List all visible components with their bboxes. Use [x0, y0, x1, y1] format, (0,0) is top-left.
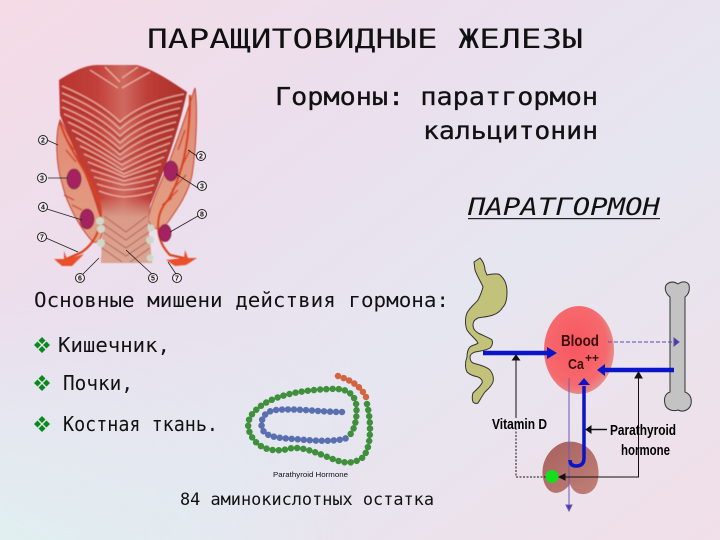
dashed arrow: blood to bone — [608, 338, 679, 346]
list: targets: Почки, — [63, 371, 133, 395]
icon: bone — [665, 282, 691, 411]
number labels: 4 — [41, 204, 45, 212]
bullet icon — [34, 337, 50, 353]
label: blood Ca: ++ — [585, 351, 599, 365]
number labels — [38, 136, 206, 282]
parathyroid glands — [67, 161, 178, 242]
number labels: 7 — [40, 234, 44, 242]
arrow: parathyroid hormone to bone and kidney — [559, 372, 642, 480]
green beads — [248, 389, 370, 462]
leader lines — [46, 140, 198, 275]
number labels: 6 — [78, 276, 82, 282]
left thyroid lobe — [57, 120, 102, 242]
list: targets: Кишечник, — [58, 333, 170, 357]
label: parathyroid hormone: hormone — [621, 442, 670, 459]
caption: Parathyroid Hormone — [273, 470, 348, 479]
blue beads — [262, 409, 347, 441]
label: vitamin D: Vitamin D — [492, 416, 547, 433]
bullet icon — [34, 375, 50, 391]
text block: hormones: Гормоны: паратгормон — [275, 82, 598, 111]
larynx muscle — [59, 65, 187, 263]
blue arrow: kidney to blood — [570, 378, 590, 466]
muscle fibres — [62, 67, 184, 197]
muscle shadows — [62, 89, 184, 179]
number labels: 5 — [151, 276, 155, 282]
list: targets: Костная ткань. — [63, 412, 218, 436]
label: parathyroid hormone: Parathyroid — [610, 422, 676, 439]
diagram: calcium regulation — [466, 258, 691, 511]
icon: green dot — [546, 470, 558, 483]
label: blood Ca: Blood — [561, 333, 599, 350]
text: main targets: Основные мишени действия гормона: — [34, 288, 449, 312]
icon: intestine — [466, 258, 507, 403]
icon: kidney — [542, 442, 598, 494]
number labels: 2 — [41, 138, 45, 144]
number labels: 3 — [40, 176, 44, 182]
number labels: 7 — [175, 276, 179, 282]
number labels: 3 — [200, 184, 204, 190]
caption: amino acid residues: 84 аминокислотных остатка — [180, 490, 434, 510]
label: blood Ca — [561, 333, 599, 373]
number labels: 8 — [200, 212, 204, 218]
icon: blood — [544, 306, 614, 394]
illustration: peptide chain — [248, 376, 370, 479]
lobe mottling — [64, 130, 190, 210]
text block: hormones — [275, 82, 598, 145]
thin arrow: calcium excretion — [566, 378, 572, 511]
orange beads — [338, 376, 366, 397]
heading: parathormone: ПАРАТГОРМОН — [467, 193, 661, 221]
right thyroid lobe — [148, 88, 196, 229]
illustration: neck with parathyroid glands — [38, 65, 206, 282]
arrow: vitamin D to intestine — [512, 355, 548, 477]
blue arrow: bone to blood — [604, 368, 674, 372]
blood vessels — [60, 95, 190, 261]
title: ПАРАЩИТОВИДНЫЕ ЖЕЛЕЗЫ — [147, 24, 583, 55]
blue arrow: intestine to blood — [483, 351, 548, 355]
label: parathyroid hormone — [610, 422, 676, 459]
bullet icon — [34, 416, 50, 432]
vessel ends — [54, 250, 197, 266]
thymus nodules — [96, 217, 154, 262]
text block: hormones: кальцитонин — [423, 116, 598, 145]
list: targets — [34, 333, 218, 436]
label: blood Ca: Ca — [568, 356, 585, 373]
number labels: 2 — [199, 154, 203, 160]
trachea fibres — [102, 216, 150, 262]
trachea — [100, 198, 152, 263]
